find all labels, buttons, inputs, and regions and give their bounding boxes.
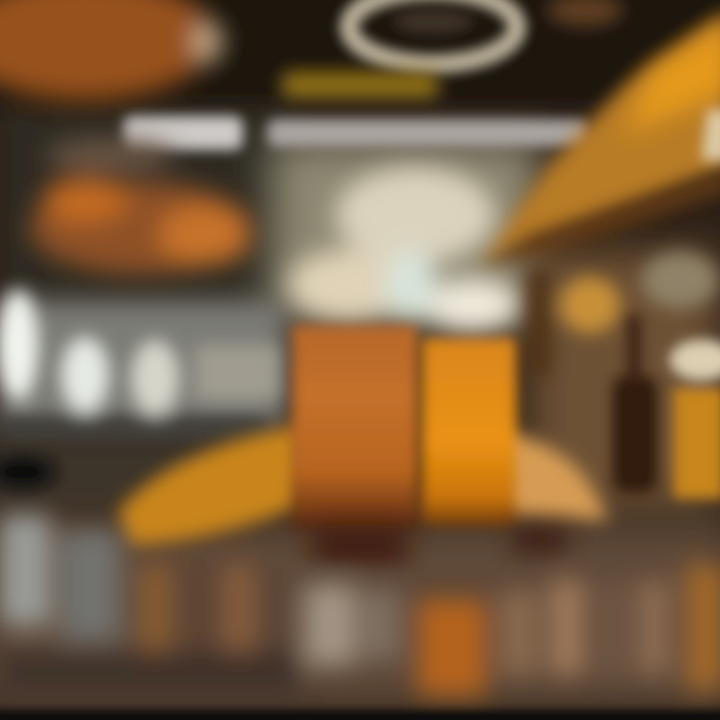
bottom dark strip xyxy=(0,708,720,720)
beer glass: left xyxy=(292,325,418,530)
bread: left golden slice xyxy=(118,425,300,545)
beer glass: right xyxy=(422,338,516,526)
lamp: top left orange shade xyxy=(0,0,222,100)
bread: right pale slice xyxy=(500,430,610,520)
heading: illegible yellow title xyxy=(282,72,438,98)
lamp: top right brown shape xyxy=(547,0,623,26)
canopy: right golden roof xyxy=(480,10,720,268)
canopy posts and shelves xyxy=(528,252,718,375)
bottle: dark bottle on right xyxy=(612,315,658,493)
pendant food shape: left orange cluster xyxy=(30,139,251,274)
subtitle: illegible white line xyxy=(124,117,588,149)
table reflections: vertical streaks xyxy=(0,515,720,695)
foam: white head above glasses xyxy=(288,167,520,331)
window lights: left white highlights xyxy=(0,290,280,490)
logo: white oval emblem at top centre xyxy=(349,0,517,64)
small glass: right edge xyxy=(670,340,720,498)
